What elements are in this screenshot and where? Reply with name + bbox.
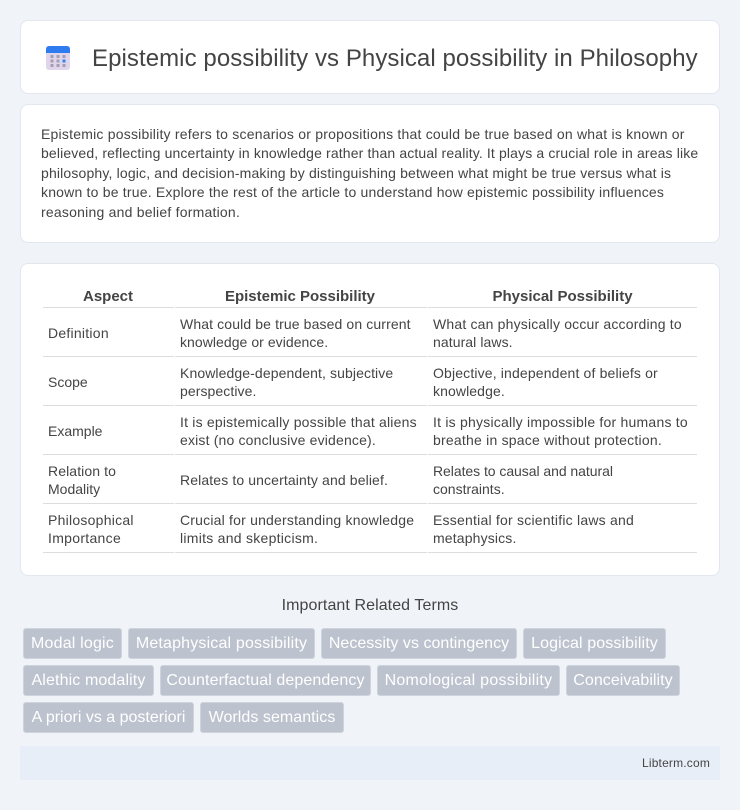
footer bar <box>20 746 720 780</box>
row: example: exist (no conclusive evidence). <box>180 432 376 448</box>
row: definition: knowledge or evidence. <box>180 334 328 350</box>
related terms tags: Worlds semantics <box>209 709 335 726</box>
related terms tags: Modal logic <box>31 635 114 652</box>
related terms tags: Necessity vs contingency <box>329 635 509 652</box>
row: scope: Objective, independent of beliefs or <box>433 365 658 381</box>
intro paragraph: Epistemic possibility refers to scenarios or propositions that could be true based on what is known or <box>41 126 685 142</box>
intro text panel <box>20 104 720 243</box>
row: definition: Definition <box>48 325 109 341</box>
row: philosophical importance: Crucial for understanding knowledge <box>180 512 414 528</box>
related terms heading: Important Related Terms <box>282 597 458 614</box>
row: philosophical importance <box>43 512 697 553</box>
related terms tags: Logical possibility <box>531 635 658 652</box>
row: philosophical importance: Philosophical <box>48 512 134 528</box>
row: example <box>43 414 697 455</box>
row: scope: perspective. <box>180 383 256 399</box>
comparison table panel <box>20 263 720 576</box>
related terms tags: Alethic modality <box>32 672 145 689</box>
header card <box>20 20 720 94</box>
row: definition: What could be true based on current <box>180 316 411 332</box>
related terms tags: Counterfactual dependency <box>166 672 365 689</box>
intro paragraph: reasoning and belief formation. <box>41 204 240 220</box>
related terms tags: Conceivability <box>573 672 673 689</box>
row: philosophical importance: metaphysics. <box>433 530 516 546</box>
row: relation to modality: Relation to <box>48 463 116 479</box>
row: definition <box>43 316 697 357</box>
intro paragraph <box>41 126 698 220</box>
row: philosophical importance: Essential for scientific laws and <box>433 512 634 528</box>
row: scope: knowledge. <box>433 383 505 399</box>
table header: Physical Possibility <box>492 288 633 305</box>
footer credit: Libterm.com <box>642 756 710 770</box>
table header: Aspect <box>83 288 133 305</box>
intro paragraph: philosophy, logic, and decision-making by distinguishing between what might be true versus what is <box>41 165 671 181</box>
row: scope: Scope <box>48 374 88 390</box>
related terms tags: Nomological possibility <box>385 672 552 689</box>
related terms tags: A priori vs a posteriori <box>32 709 185 726</box>
row: example: It is physically impossible for humans to <box>433 414 688 430</box>
row: relation to modality: Modality <box>48 481 100 497</box>
table header <box>43 288 697 308</box>
related terms tags: Metaphysical possibility <box>136 635 307 652</box>
row: example: It is epistemically possible that aliens <box>180 414 417 430</box>
related terms tags <box>23 628 680 733</box>
row: relation to modality: Relates to causal and natural <box>433 463 613 479</box>
row: example: breathe in space without protection. <box>433 432 662 448</box>
row: definition: natural laws. <box>433 334 513 350</box>
icon: calendar <box>46 46 70 70</box>
row: relation to modality <box>43 463 697 504</box>
intro paragraph: known to be true. Explore the rest of the article to understand how epistemic possibility influences <box>41 184 664 200</box>
table header: Epistemic Possibility <box>225 288 375 305</box>
row: relation to modality: constraints. <box>433 481 505 497</box>
row: relation to modality: Relates to uncertainty and belief. <box>180 472 388 488</box>
row: scope <box>43 365 697 406</box>
row: philosophical importance: limits and skepticism. <box>180 530 318 546</box>
row: philosophical importance: Importance <box>48 530 121 546</box>
intro paragraph: believed, reflecting uncertainty in knowledge rather than actual reality. It plays a crucial role in areas like <box>41 145 698 161</box>
row: definition: What can physically occur according to <box>433 316 682 332</box>
row: example: Example <box>48 423 102 439</box>
row: scope: Knowledge-dependent, subjective <box>180 365 393 381</box>
title: Epistemic possibility vs Physical possibility in Philosophy <box>92 45 698 72</box>
